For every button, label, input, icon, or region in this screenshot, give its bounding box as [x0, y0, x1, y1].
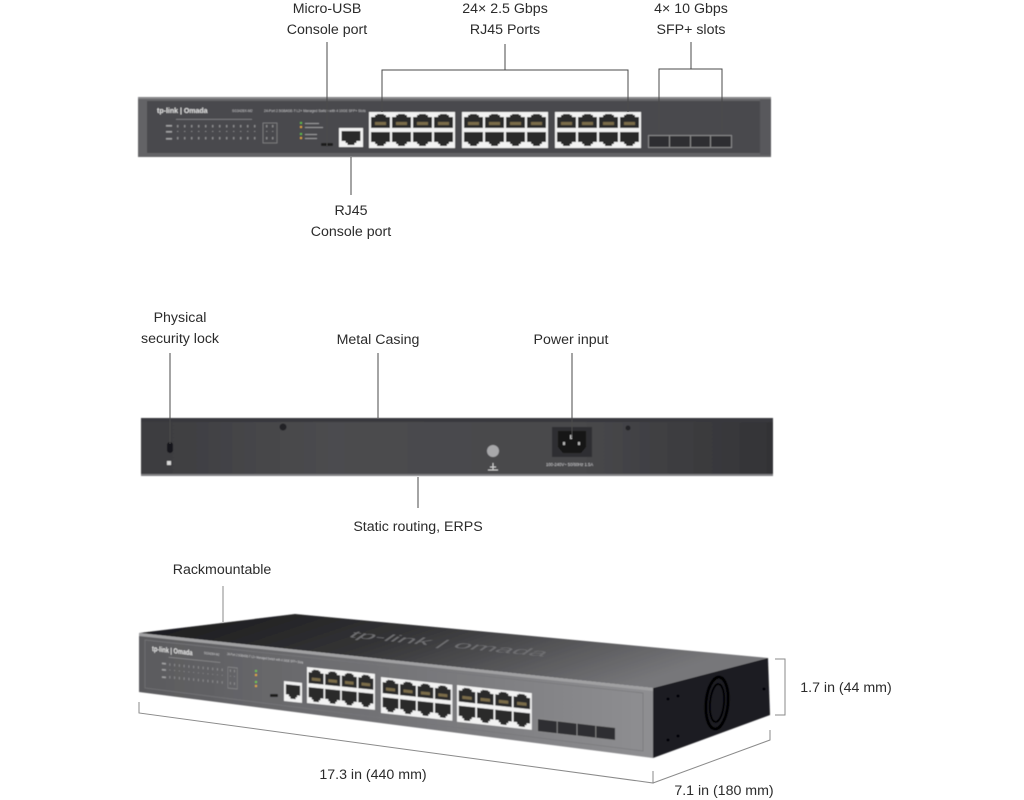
label: physical security lock: security lock — [141, 331, 220, 347]
label: rackmountable: Rackmountable — [173, 562, 271, 578]
panel: front view switch — [138, 97, 771, 157]
front model text: SG3428X-M2 — [232, 109, 253, 113]
power socket — [552, 427, 592, 457]
micro-USB port — [321, 143, 333, 146]
top face logo: tp-link | omada — [344, 629, 556, 659]
perspective SFP+ slots — [537, 718, 616, 741]
rack holes — [666, 688, 766, 742]
label: SFP+ slots: SFP+ slots — [656, 22, 726, 38]
panel: perspective switch — [139, 614, 770, 758]
label: static routing, ERPS: Static routing, ERPS — [353, 519, 483, 535]
top face — [139, 614, 768, 688]
SFP+ slots — [648, 135, 732, 148]
screw right — [626, 426, 630, 430]
label: SFP+ slots: 4× 10 Gbps — [654, 1, 728, 17]
perspective description text: 24-Port 2.5GBASE-T L2+ Managed Switch with 4 10GE SFP+ Slots — [227, 652, 304, 665]
RJ45 port block 1 — [369, 112, 455, 148]
perspective port block 3 — [457, 685, 532, 730]
power rating text: 100-240V~ 50/60Hz 1.5A — [546, 462, 593, 467]
LED indicators — [166, 119, 277, 143]
panel: rear view switch — [141, 418, 773, 476]
ground terminal — [487, 445, 499, 457]
front logo: tp-link | Omada — [157, 108, 208, 115]
front face — [139, 633, 653, 758]
leader line: rackmountable — [222, 586, 224, 622]
screw left — [280, 424, 286, 430]
perspective logo: tp-link | Omada — [152, 645, 193, 658]
perspective model text: SG3428X-M2 — [204, 651, 220, 657]
label: Micro-USB console port: Console port — [287, 22, 367, 38]
label: power input: Power input — [534, 332, 609, 348]
label: depth: 7.1 in (180 mm) — [674, 783, 774, 799]
label: height: 1.7 in (44 mm) — [800, 680, 892, 696]
RJ45 port block 2 — [462, 112, 548, 148]
fan vent — [704, 676, 730, 730]
perspective micro-USB port — [270, 694, 278, 697]
dimension lines — [139, 659, 785, 783]
label: width: 17.3 in (440 mm) — [319, 767, 427, 783]
perspective LED indicators — [162, 656, 237, 689]
status LEDs — [300, 122, 323, 139]
label: RJ45 ports: 24× 2.5 Gbps — [462, 1, 548, 17]
leader lines: rear view — [170, 353, 572, 508]
RJ45 console port — [339, 128, 363, 147]
label: RJ45 console port: RJ45 — [334, 203, 368, 219]
perspective RJ45 console port — [284, 681, 302, 703]
security lock slot — [167, 442, 173, 453]
front description text: 24-Port 2.5GBASE-T L2+ Managed Switch with 4 10GE SFP+ Slots — [264, 109, 366, 113]
perspective status LEDs — [255, 670, 257, 687]
lock icon — [167, 461, 171, 465]
RJ45 port block 3 — [555, 112, 641, 148]
label: metal casing: Metal Casing — [337, 332, 419, 348]
label: physical security lock: Physical — [154, 310, 206, 326]
label: RJ45 ports: RJ45 Ports — [470, 22, 540, 38]
label: Micro-USB console port: Micro-USB — [293, 1, 361, 17]
perspective port block 2 — [381, 677, 452, 721]
perspective port block 1 — [307, 667, 375, 710]
leader lines: front view — [327, 42, 722, 195]
ground symbol — [488, 463, 498, 470]
side face — [653, 658, 770, 758]
label: RJ45 console port: Console port — [311, 224, 391, 240]
